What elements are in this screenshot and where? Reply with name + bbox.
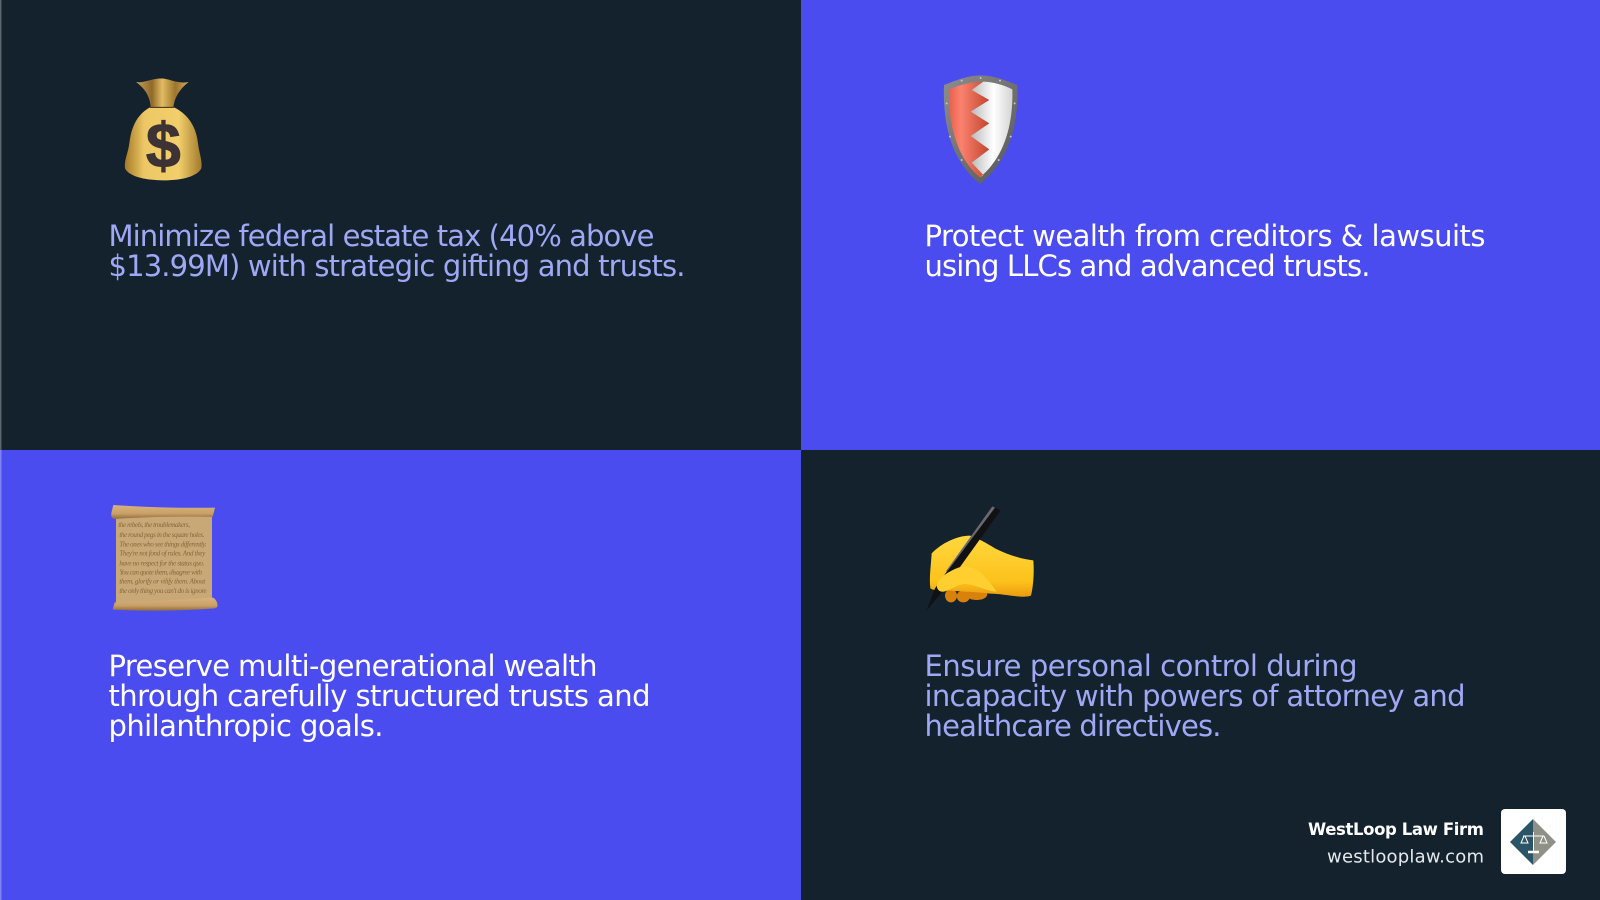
icon: scroll: You can quote them, disagree with <box>119 568 202 576</box>
firm website: westlooplaw.com <box>1327 846 1484 868</box>
text: legacy preservation: philanthropic goals. <box>108 709 384 743</box>
icon: scroll: the round pegs in the square holes. <box>119 531 205 539</box>
panel: asset protection <box>801 0 1600 450</box>
icon: scroll: They're not fond of rules. And they <box>119 550 206 558</box>
icon: scroll: them, glorify or vilify them. About <box>119 578 206 586</box>
icon: scroll: the only thing you can't do is ignore <box>119 587 207 595</box>
text: incapacity control: Ensure personal control during <box>924 649 1358 683</box>
text: incapacity control: incapacity with powers of attorney and <box>924 679 1466 713</box>
icon: scroll: the rebels, the troublemakers, <box>118 521 190 529</box>
icon: scroll: have no respect for the status quo. <box>119 559 205 567</box>
text: tax minimization: $13.99M) with strategic gifting and trusts. <box>108 249 686 283</box>
icon: writing hand <box>927 506 1034 610</box>
icon: scroll: The ones who see things differently. <box>119 540 207 548</box>
icon: shield <box>944 75 1017 184</box>
icon: money bag <box>125 78 202 181</box>
text: legacy preservation: Preserve multi-generational wealth <box>108 649 598 683</box>
text: legacy preservation: through carefully structured trusts and <box>108 679 650 713</box>
logo <box>1501 809 1566 874</box>
text: asset protection: Protect wealth from creditors & lawsuits <box>924 219 1486 253</box>
text: tax minimization: Minimize federal estate tax (40% above <box>108 219 654 253</box>
panel: legacy preservation <box>0 450 801 900</box>
firm name: WestLoop Law Firm <box>1308 820 1484 839</box>
icon: scroll <box>111 505 217 611</box>
panel: tax minimization <box>0 0 801 450</box>
icon: money bag: $ <box>146 111 181 181</box>
text: asset protection: using LLCs and advanced trusts. <box>924 249 1370 283</box>
panel: incapacity control <box>801 450 1600 900</box>
text: incapacity control: healthcare directives. <box>924 709 1222 743</box>
